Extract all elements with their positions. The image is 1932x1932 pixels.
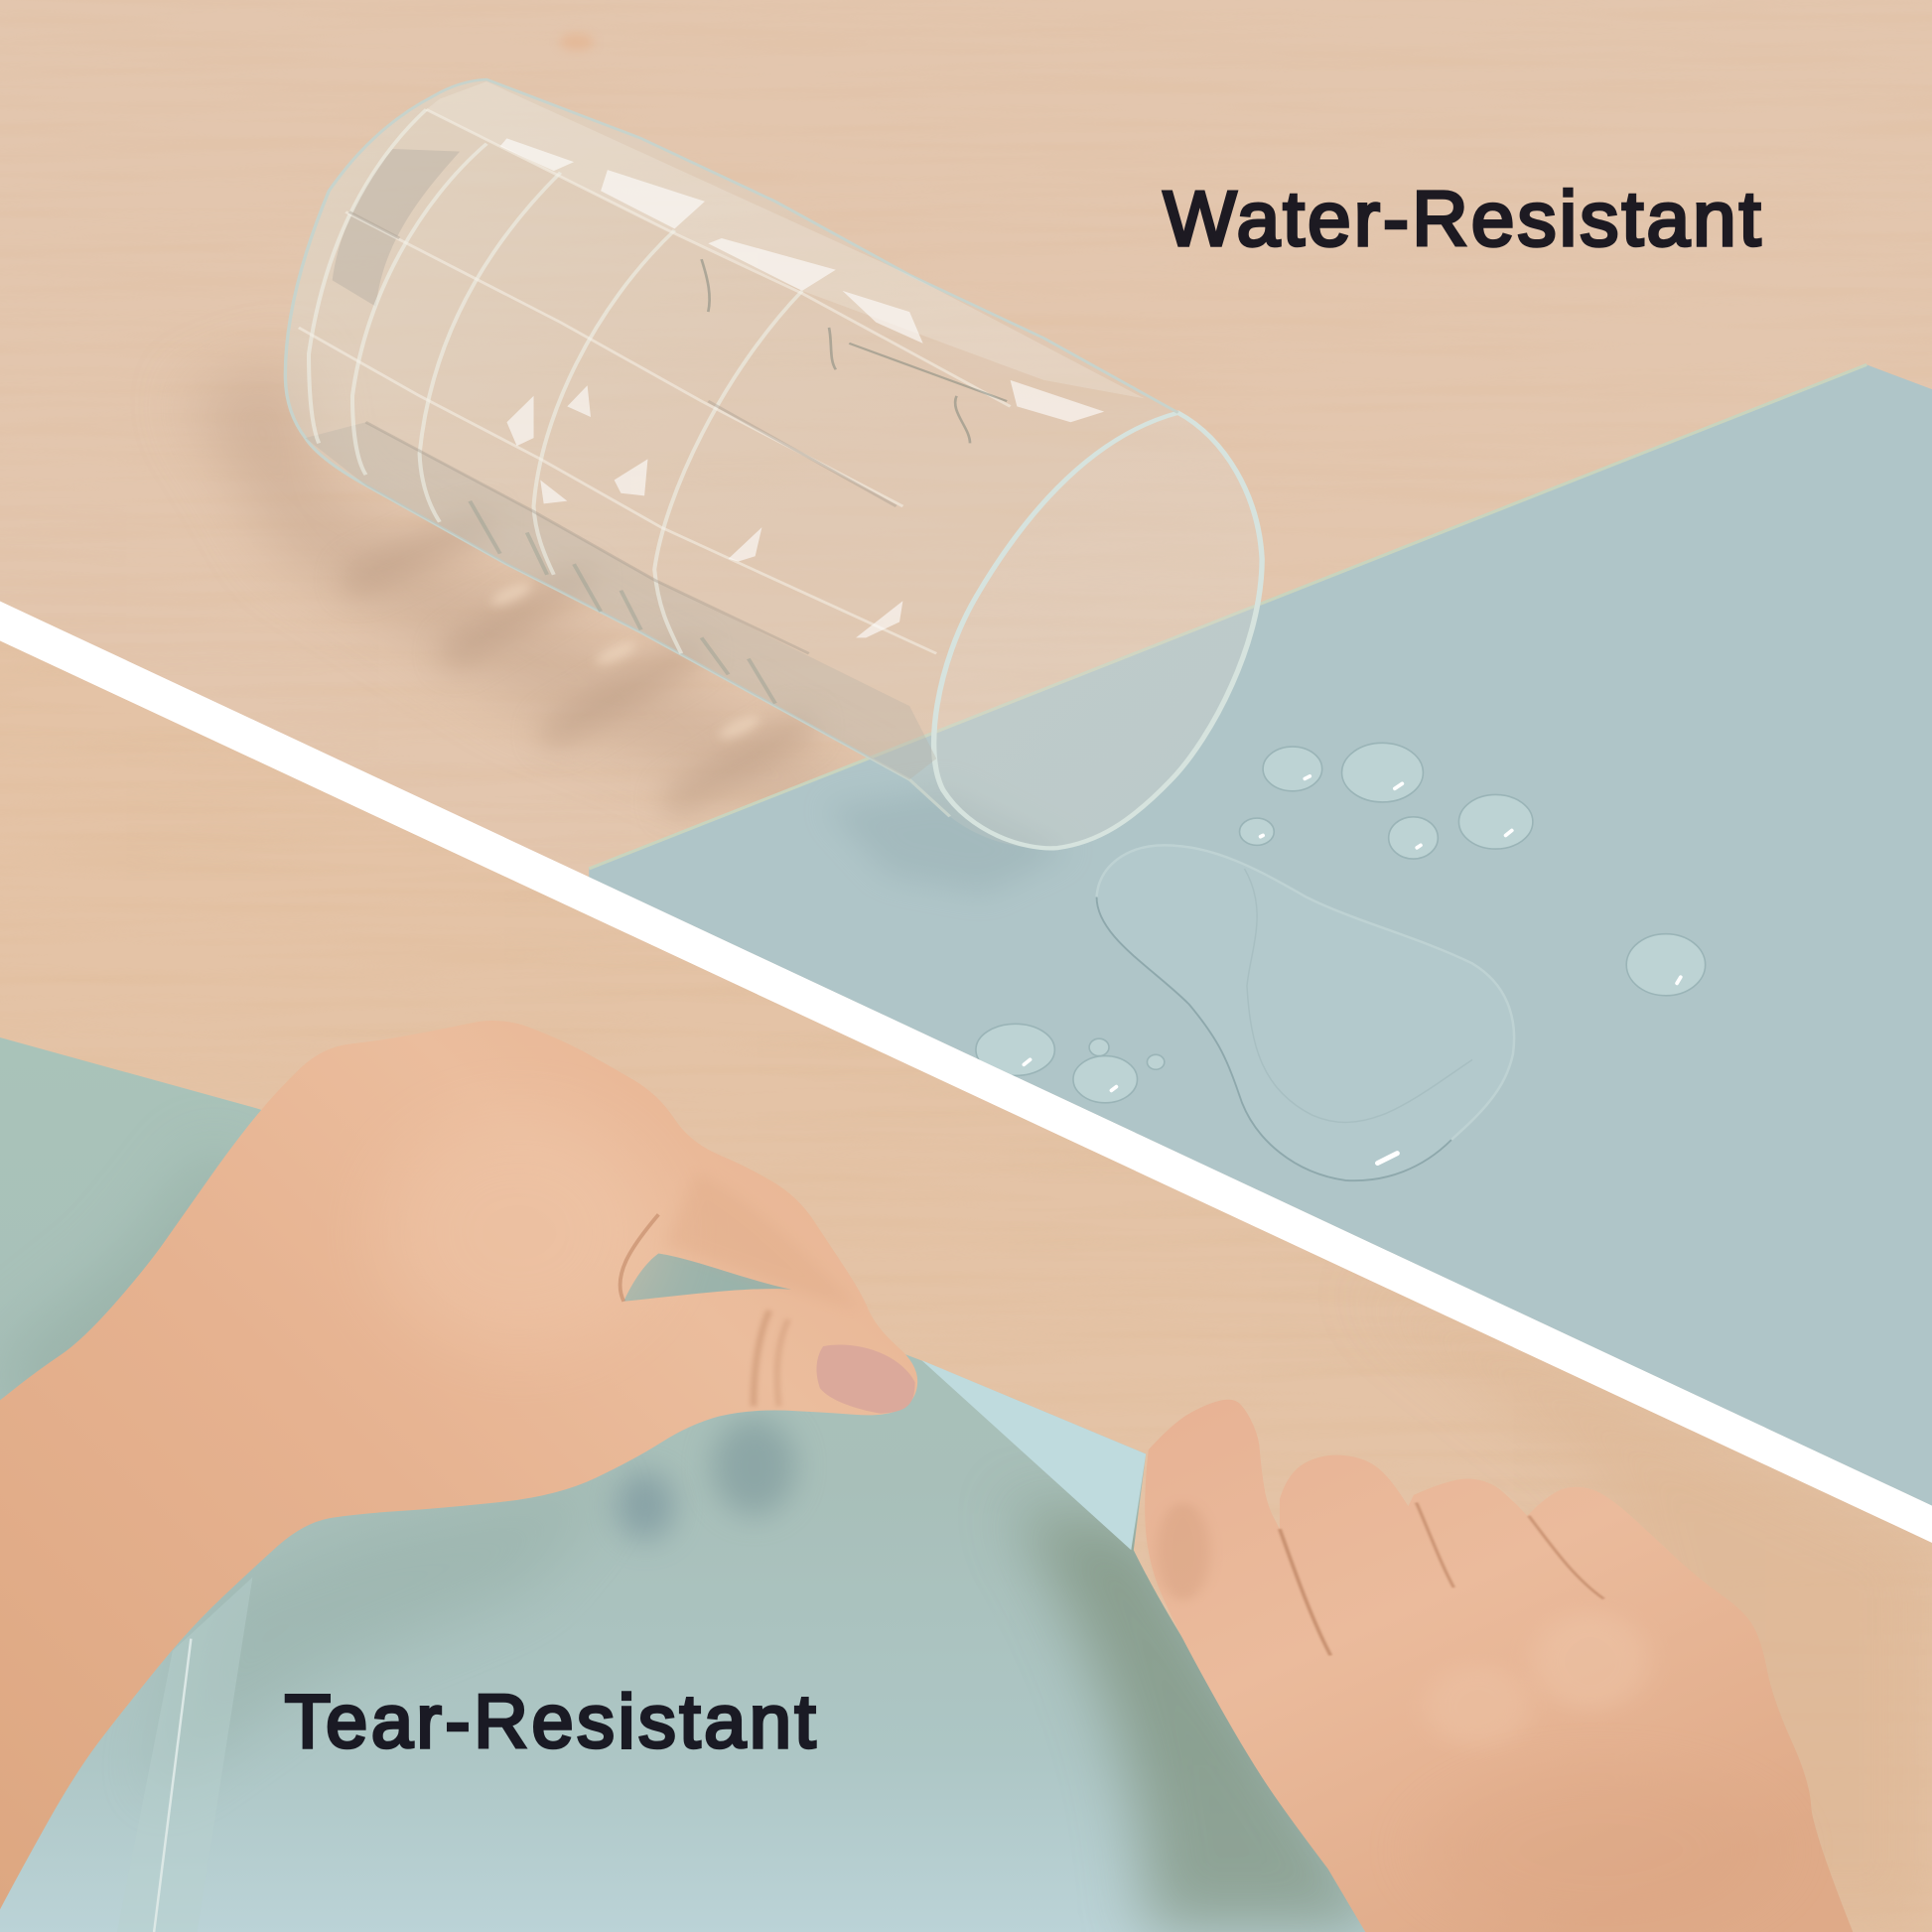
puddle left edge [1097, 897, 1451, 1180]
glass rim [934, 413, 1262, 848]
wood table top [0, 0, 1932, 1540]
thumb crease [754, 1311, 769, 1406]
hand shadow on mat [148, 1478, 617, 1799]
lower wood warm corner [1355, 1282, 1932, 1932]
glass dark base band [333, 149, 460, 307]
panel: tear-resistant photo [0, 617, 1932, 1932]
glass dark grooves [349, 211, 897, 653]
puddle highlight [1378, 1154, 1397, 1164]
finger shading [665, 1173, 861, 1311]
sea-green mat [0, 1037, 1368, 1932]
wood grain [0, 0, 1932, 1540]
thumb crease [777, 1319, 788, 1406]
back of hand highlight [380, 1113, 658, 1352]
finger shadow [617, 1471, 675, 1540]
back of hand shade [1430, 1767, 1772, 1932]
glass shadow on mat [855, 799, 1039, 882]
glass outer edge [285, 79, 1178, 816]
knuckle crease [1529, 1516, 1603, 1598]
knuckle highlight [1425, 1665, 1532, 1748]
mat fold band [117, 1578, 252, 1932]
glass caustic lights [488, 578, 762, 743]
wood knot [559, 34, 594, 51]
water droplets [976, 743, 1706, 1103]
lower wood grain [0, 617, 1932, 1932]
droplet [1626, 934, 1706, 996]
glass body [285, 79, 1262, 849]
mat edge highlight [589, 364, 1866, 869]
lower wood table [0, 617, 1932, 1932]
droplet glints [1024, 776, 1681, 1090]
drinking glass [285, 79, 1262, 849]
mat crease line [154, 1639, 191, 1932]
heading: Tear-Resistant: Tear-Resistant [285, 1680, 816, 1764]
panel: water-resistant photo [0, 0, 1932, 1540]
droplet [1342, 743, 1423, 802]
white diagonal divider [0, 602, 1932, 1543]
heading: Water-Resistant: Water-Resistant [1164, 175, 1761, 262]
thumb shadow [712, 1417, 796, 1516]
droplet [1263, 747, 1322, 791]
knuckle crease [1280, 1529, 1330, 1655]
water puddle [1097, 845, 1514, 1180]
droplet [1458, 794, 1533, 849]
right hand silhouette [1145, 1400, 1853, 1932]
blue mat [589, 364, 1932, 1540]
left hand [0, 1021, 917, 1909]
droplet [1389, 817, 1438, 859]
droplet [976, 1024, 1054, 1075]
thumb-side shade [1157, 1502, 1210, 1600]
glass light top strip [426, 81, 1145, 398]
gap between finger and thumb [623, 1254, 791, 1302]
glass caustic stripes [357, 523, 801, 801]
glass bottom ribs [470, 501, 775, 704]
thumb nail [816, 1345, 915, 1414]
puddle shape [1097, 845, 1514, 1180]
droplet [1240, 818, 1274, 845]
glass highlights [500, 138, 1104, 637]
glass mouth clear area [934, 413, 1262, 848]
droplet [1089, 1038, 1109, 1056]
droplet [1147, 1054, 1165, 1069]
mat shadows [0, 1146, 1392, 1932]
left hand silhouette [0, 1021, 917, 1909]
glass rings [309, 109, 802, 653]
glass grey lower band [306, 422, 936, 779]
glass sparkle lines [702, 259, 1007, 443]
glass grooves [299, 109, 1011, 653]
knuckle crease [1417, 1502, 1453, 1587]
droplet [1073, 1056, 1138, 1103]
puddle inner ripple [1244, 869, 1472, 1122]
knuckle highlight [1532, 1612, 1649, 1711]
puddle upper edge [1097, 845, 1514, 1140]
wrist shadow on mat [0, 1146, 259, 1442]
curled mat flap [921, 1360, 1146, 1550]
right hand [1145, 1400, 1853, 1932]
finger crease [621, 1214, 658, 1302]
mat shade near curl [1011, 1503, 1392, 1932]
glass shadow on table [203, 369, 833, 803]
